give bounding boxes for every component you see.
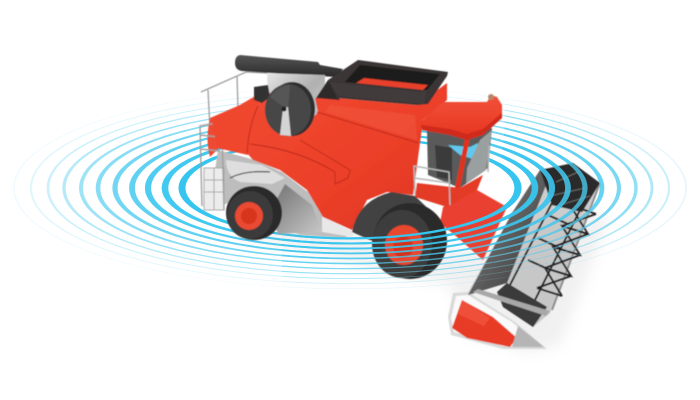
feeder house: [440, 190, 507, 260]
unloading auger pipe: [235, 55, 343, 77]
body highlight panel: [325, 105, 417, 140]
roof beacon: [488, 94, 494, 100]
cab glass: [427, 128, 492, 188]
grain tank hopper: [328, 60, 448, 105]
rear side rail: [200, 123, 224, 210]
engine air intake: [254, 85, 270, 103]
rear ladder grid: [204, 168, 224, 210]
rear engine deck: [208, 92, 300, 157]
combine harvester: [200, 55, 600, 349]
main red body: [247, 83, 447, 230]
header silver outline: [448, 292, 547, 349]
rear wheel: [226, 186, 282, 240]
header silver edge: [467, 214, 514, 296]
cab handrail: [414, 145, 489, 205]
body crease lines: [247, 106, 418, 184]
rear handrail: [201, 72, 268, 128]
radar rings in front of machine: [282, 100, 686, 289]
header trough: [468, 170, 548, 295]
header red crop divider: [452, 300, 517, 347]
radar rings behind machine: [14, 87, 686, 289]
grain header: [448, 163, 600, 349]
header dark reel top: [540, 163, 600, 212]
cab base and platform: [415, 175, 483, 207]
silver housing box: [267, 73, 325, 130]
cab roof: [420, 95, 502, 140]
front wheel: [372, 203, 447, 279]
header reel truss: [510, 183, 600, 310]
ground shadow: [235, 215, 610, 352]
silver lower frame: [212, 150, 352, 238]
header truss backing: [503, 163, 600, 327]
grain tank support: [316, 80, 340, 100]
unloading reel disc: [265, 82, 315, 136]
front wheel arch: [352, 192, 440, 250]
header rear boxes: [497, 283, 547, 327]
illustration: combine harvester with radar rings: [13, 54, 687, 350]
